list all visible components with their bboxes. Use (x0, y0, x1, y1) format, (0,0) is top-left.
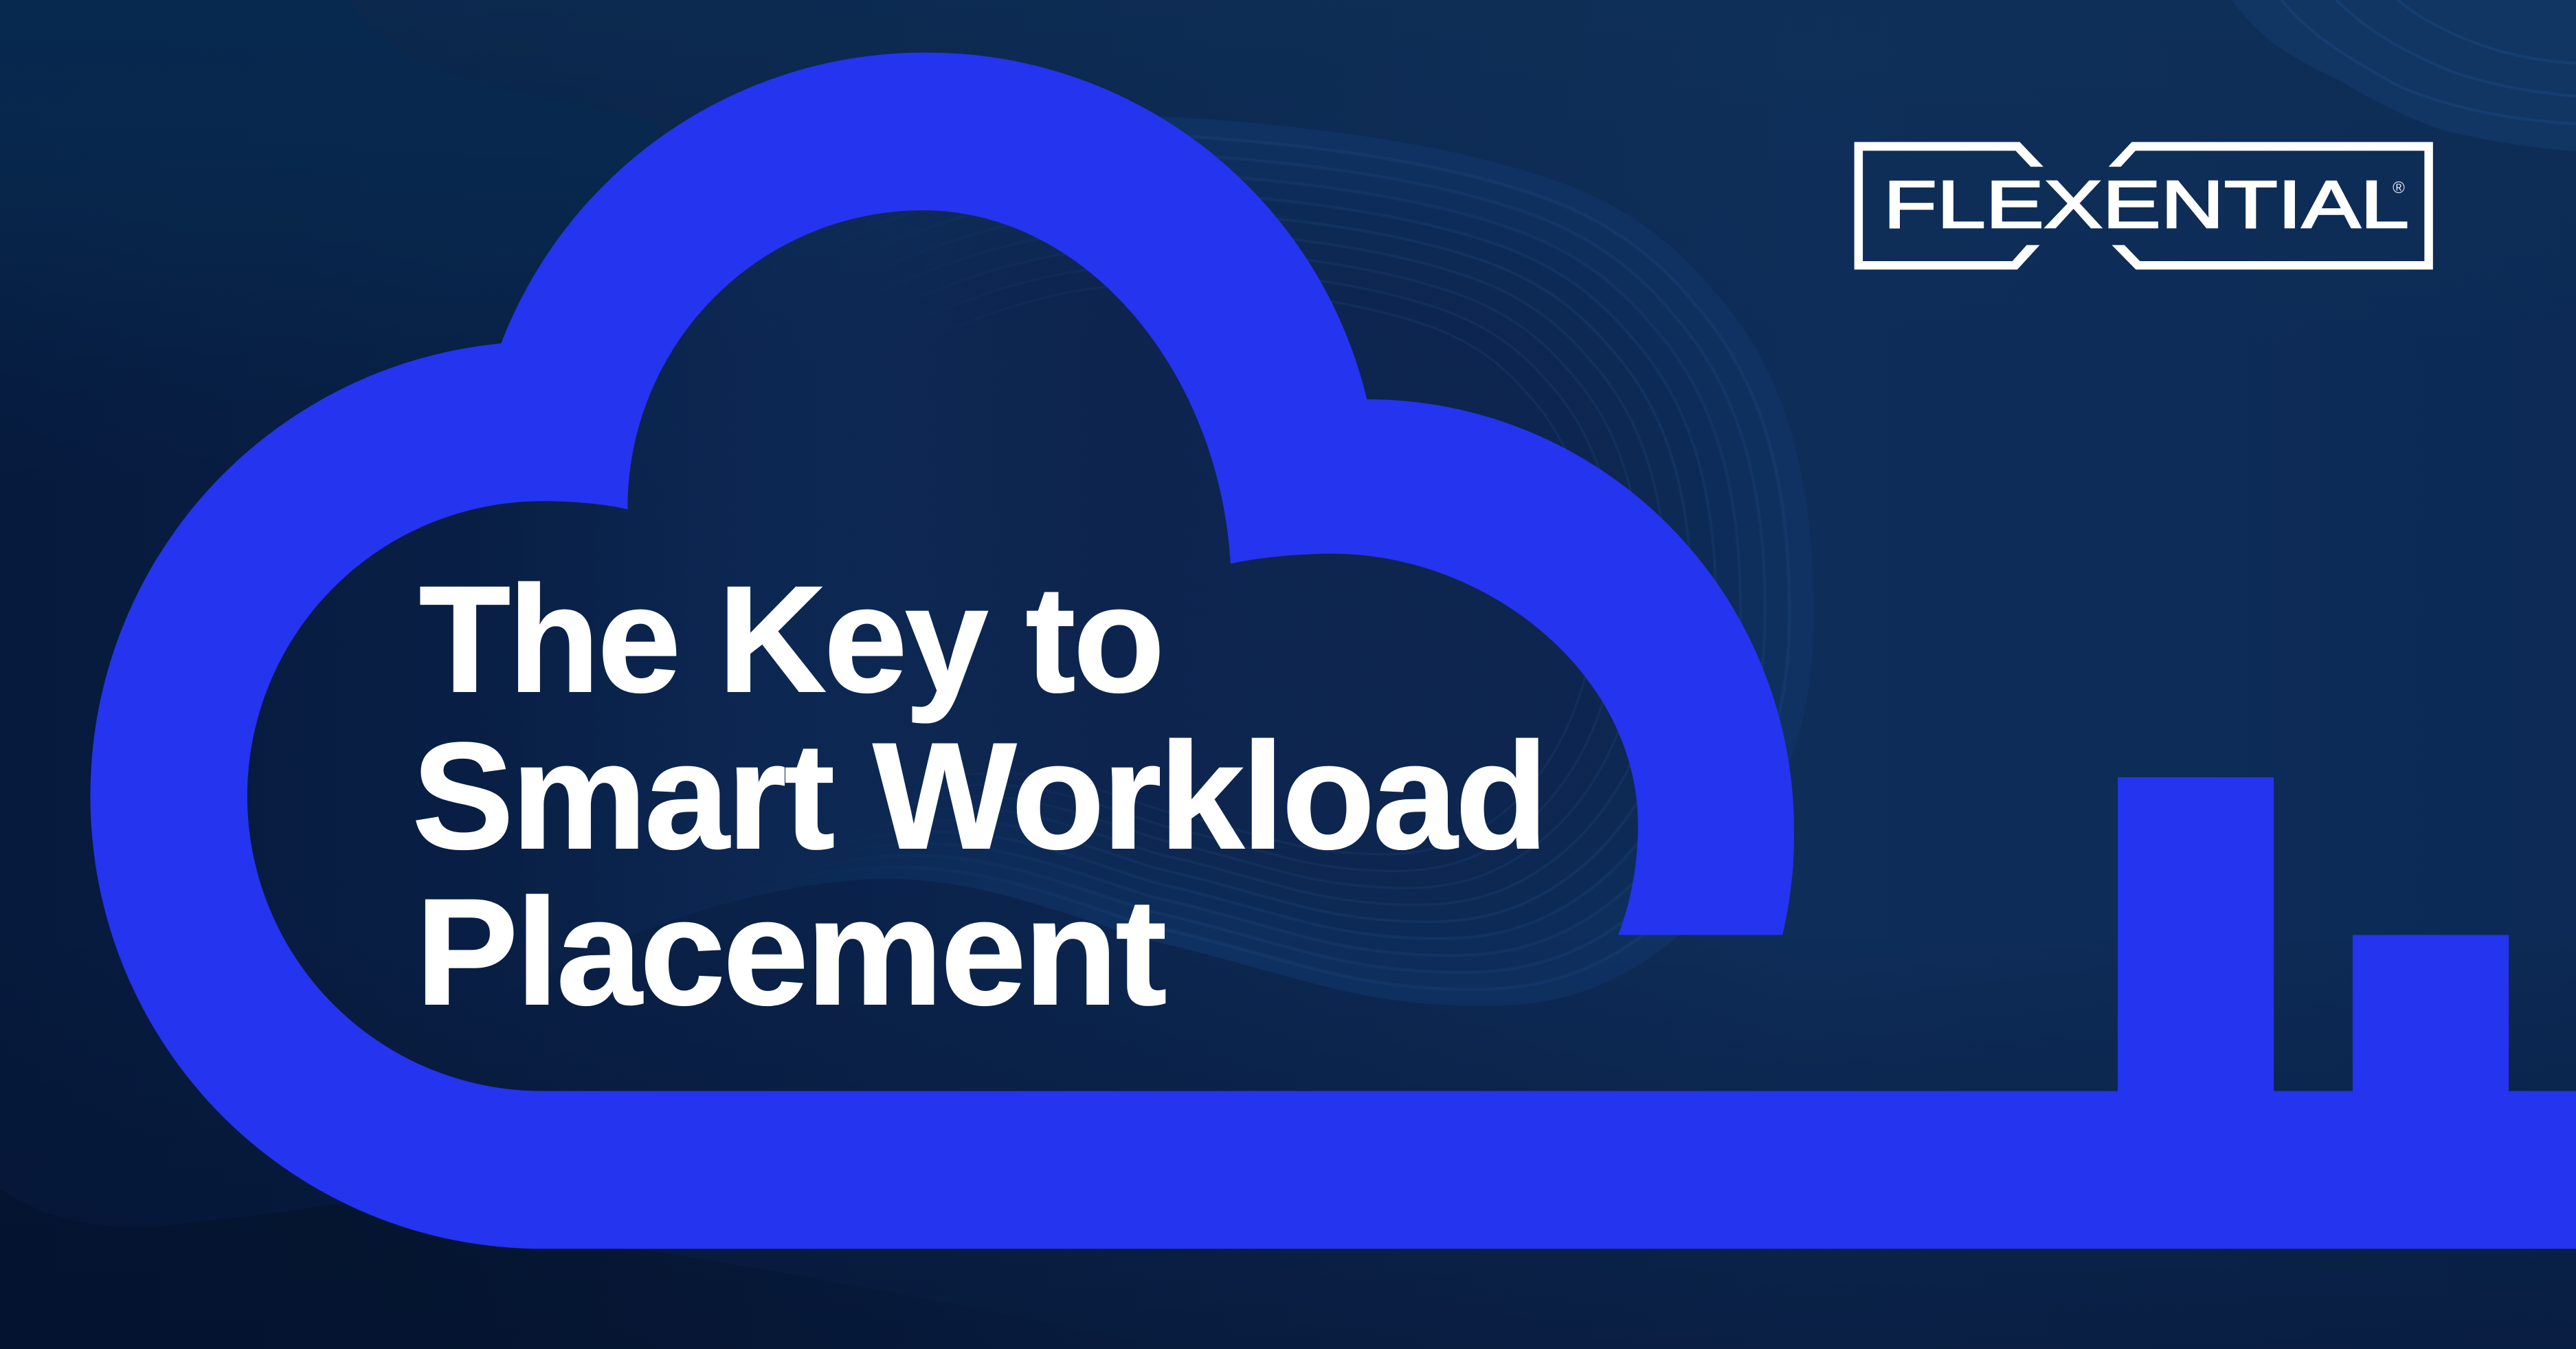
title line 1: The Key to (419, 555, 1163, 724)
band: top right (2232, 0, 2576, 151)
band: bottom left (0, 1189, 1168, 1349)
logo frame right (2109, 142, 2433, 269)
logo registered mark: ® (2393, 179, 2405, 197)
title line 2: Smart Workload (412, 711, 1546, 880)
band: top left (0, 0, 687, 481)
title (412, 555, 1546, 1036)
logo wordmark: FLEXENTIAL (1883, 167, 2409, 242)
title line 3: Placement (416, 867, 1165, 1036)
logo: Flexential (1855, 142, 2433, 269)
wave with concentric rings (344, 115, 1814, 1072)
logo frame left (1855, 142, 2043, 269)
